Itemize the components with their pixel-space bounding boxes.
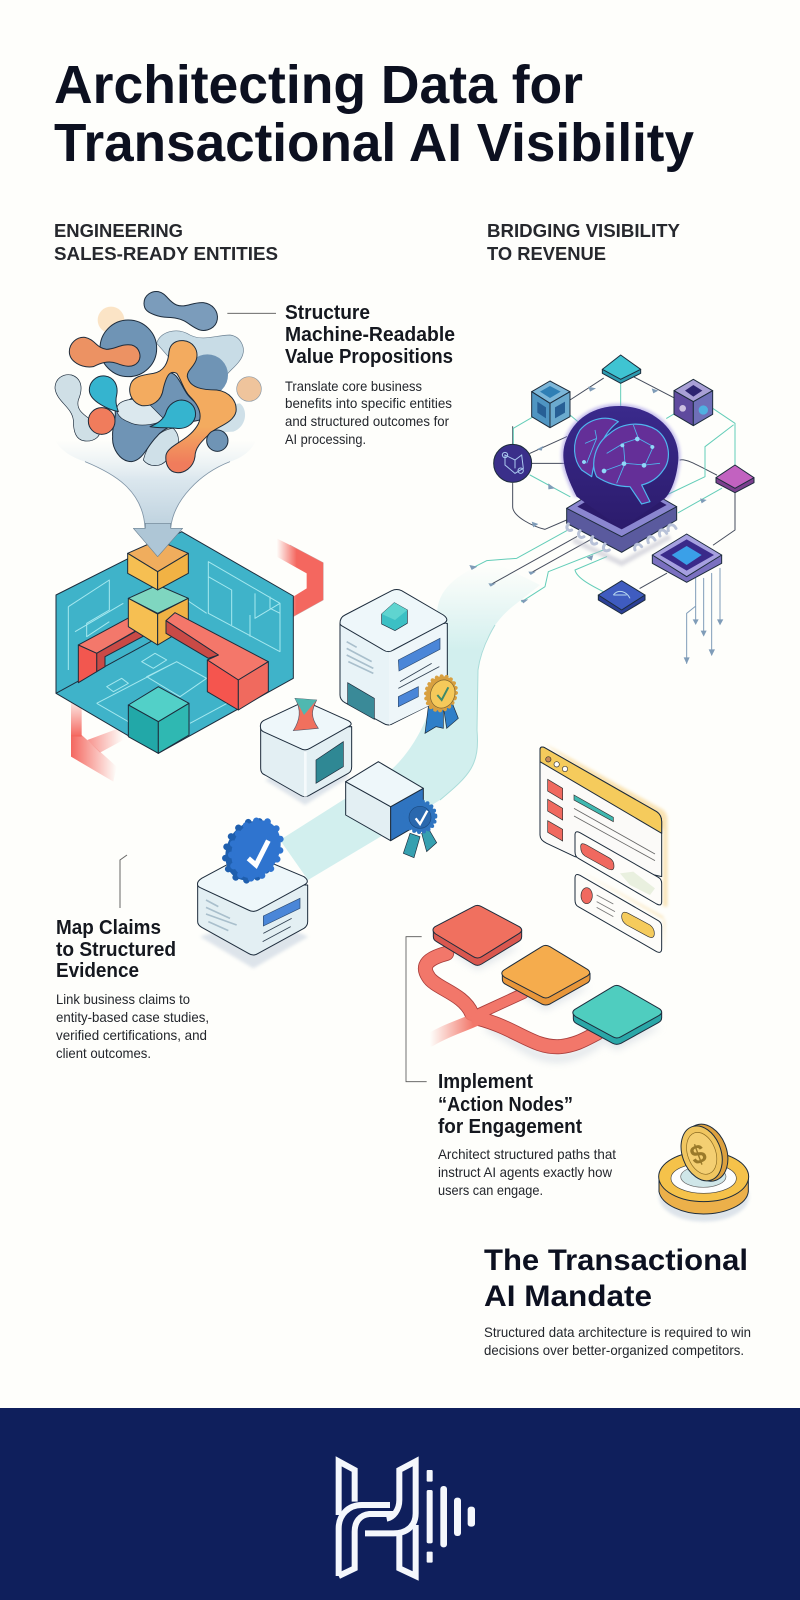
brain [575, 418, 668, 504]
heading: bridging visibility to revenue: TO REVENUE [487, 244, 606, 264]
network wires [469, 377, 735, 664]
box: hourglass icon [260, 698, 352, 805]
text block: map claims to structured evidence: client outcomes. [56, 1045, 151, 1061]
text block: implement action nodes for engagement: Implement [438, 1071, 533, 1093]
node shadows [440, 943, 662, 1058]
blueprint floor plan lines [56, 562, 280, 723]
leader line [227, 312, 276, 315]
heading: engineering sales-ready entities: SALES-READY ENTITIES [54, 244, 278, 264]
text block: the transactional AI mandate [484, 1244, 751, 1358]
illustration: evidence boxes with badges [197, 589, 461, 968]
network node: pink tile [716, 465, 754, 493]
teal action node [573, 985, 662, 1044]
network node: purple cube [674, 379, 713, 426]
network node: top teal tile [602, 355, 641, 383]
text block: map claims to structured evidence: Map Claims [56, 917, 161, 939]
bracket [406, 937, 427, 1082]
network node: circle icon [494, 444, 532, 482]
funnel arrow [50, 420, 260, 557]
text block: structure machine-readable value propositions: AI processing. [285, 431, 366, 447]
text block: implement action nodes for engagement: “Action Nodes” [438, 1094, 573, 1116]
title [54, 55, 694, 173]
illustration: AI brain chip network [469, 355, 754, 664]
funnel outline [85, 462, 230, 528]
text block: implement action nodes for engagement: instruct AI agents exactly how [438, 1164, 613, 1180]
text block: structure machine-readable value propositions: Structure [285, 302, 370, 324]
glowing brain dome [563, 406, 678, 528]
illustration: data blobs funnel and blueprint cube [50, 292, 323, 782]
heading: engineering sales-ready entities: ENGINEERING [54, 221, 183, 241]
title: Architecting Data for [54, 55, 583, 115]
title: Transactional AI Visibility [54, 113, 694, 173]
text block: structure machine-readable value propositions: benefits into specific entities [285, 395, 452, 411]
funnel arrowhead over cube [133, 523, 183, 557]
blue ribbon badge [403, 801, 437, 858]
output chip [652, 534, 722, 582]
text block: structure machine-readable value propositions: and structured outcomes for [285, 413, 449, 429]
footer band [0, 1408, 800, 1600]
logo [339, 1461, 475, 1576]
browser window [540, 743, 667, 952]
text block: structure machine-readable value propositions: Translate core business [285, 378, 422, 394]
leader line: map claims [120, 855, 127, 908]
text block: implement action nodes for engagement: Architect structured paths that [438, 1146, 616, 1162]
yellow stacked cubes [128, 540, 188, 645]
heading: engineering sales-ready entities [54, 221, 278, 264]
red connector arms [78, 612, 152, 683]
red pipes behind platform [71, 538, 323, 782]
box: blue faced [346, 762, 423, 841]
text block: map claims to structured evidence: verified certifications, and [56, 1027, 207, 1043]
text block: map claims to structured evidence [56, 917, 209, 1061]
text block: map claims to structured evidence: entity-based case studies, [56, 1009, 209, 1025]
text block: the transactional AI mandate: The Transactional [484, 1244, 748, 1277]
dome glow [563, 406, 678, 498]
text block: the transactional AI mandate: decisions over better-organized competitors. [484, 1342, 744, 1358]
text block: implement action nodes for engagement: users can engage. [438, 1182, 543, 1198]
text block: structure machine-readable value propositions [285, 302, 455, 447]
box: building with document [340, 589, 447, 725]
text block: the transactional AI mandate: AI Mandate [484, 1280, 652, 1313]
logo sound bars [427, 1470, 475, 1563]
text block: map claims to structured evidence: Evidence [56, 960, 139, 982]
blue tile node [598, 581, 645, 614]
teal cube [128, 687, 189, 753]
teal ribbon path connecting evidence boxes to AI chip [280, 560, 540, 880]
icon: coin on stand [659, 1118, 749, 1222]
heading: bridging visibility to revenue [487, 221, 680, 264]
heading: bridging visibility to revenue: BRIDGING VISIBILITY [487, 221, 680, 241]
text block: map claims to structured evidence: to Structured [56, 939, 176, 961]
text block: the transactional AI mandate: Structured data architecture is required to win [484, 1324, 751, 1340]
main chip base [567, 475, 677, 563]
sub card with profile [575, 874, 662, 952]
network node: blue cube [532, 381, 570, 428]
sub card with button [575, 832, 662, 905]
orange action node [502, 945, 590, 1005]
text block: structure machine-readable value propositions: Machine-Readable [285, 324, 455, 346]
icon: coin on stand: $ [686, 1138, 710, 1171]
gold badge [421, 672, 461, 733]
right red arm [166, 613, 268, 710]
text block: implement action nodes for engagement: for Engagement [438, 1116, 582, 1138]
coral action node [433, 905, 522, 965]
logo H mark [339, 1461, 416, 1576]
text block: implement action nodes for engagement [438, 1071, 616, 1198]
messy data blobs [55, 292, 261, 473]
illustration: interface and action nodes [406, 743, 749, 1222]
text block: map claims to structured evidence: Link business claims to [56, 991, 190, 1007]
box: evidence document [197, 853, 308, 968]
blueprint platform [56, 532, 293, 753]
coral paths [425, 953, 597, 1047]
large verified badge [216, 812, 290, 889]
text block: structure machine-readable value propositions: Value Propositions [285, 346, 453, 368]
